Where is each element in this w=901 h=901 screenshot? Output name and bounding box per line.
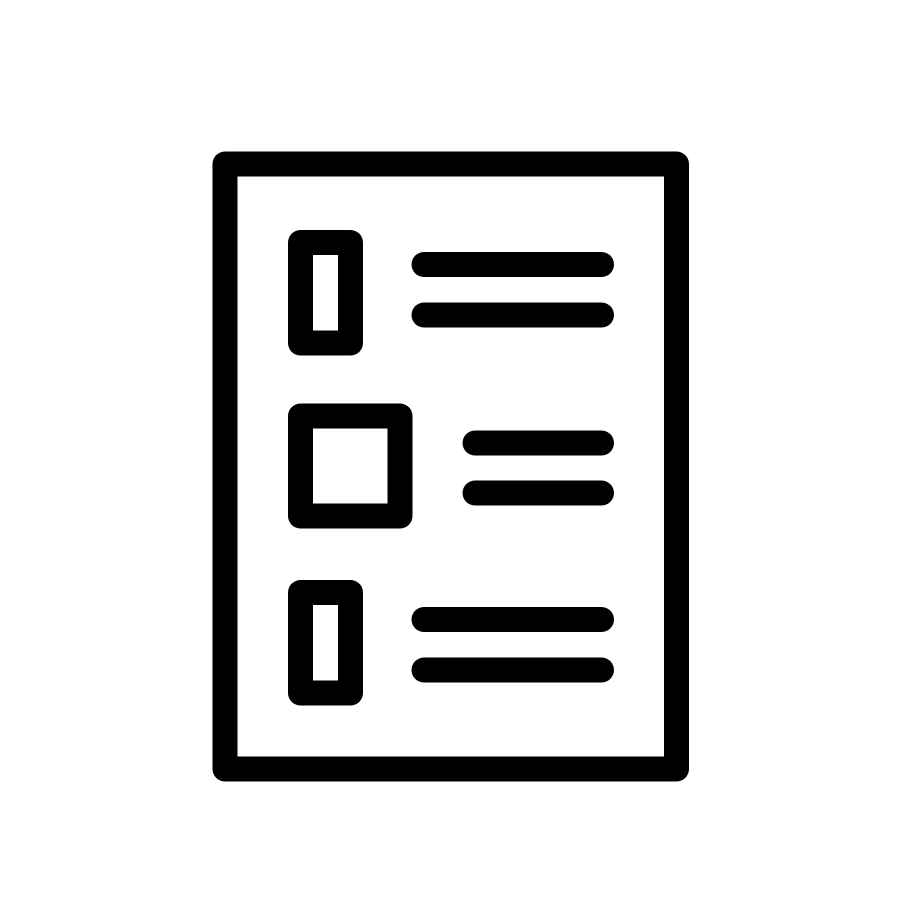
third item: narrow box	[300, 592, 350, 693]
second item: text lines	[475, 443, 602, 493]
page outline	[225, 164, 676, 769]
third item: text lines	[424, 620, 602, 670]
first item: text lines	[424, 264, 602, 315]
second item: square box	[300, 416, 400, 516]
first item: narrow box	[300, 242, 350, 343]
